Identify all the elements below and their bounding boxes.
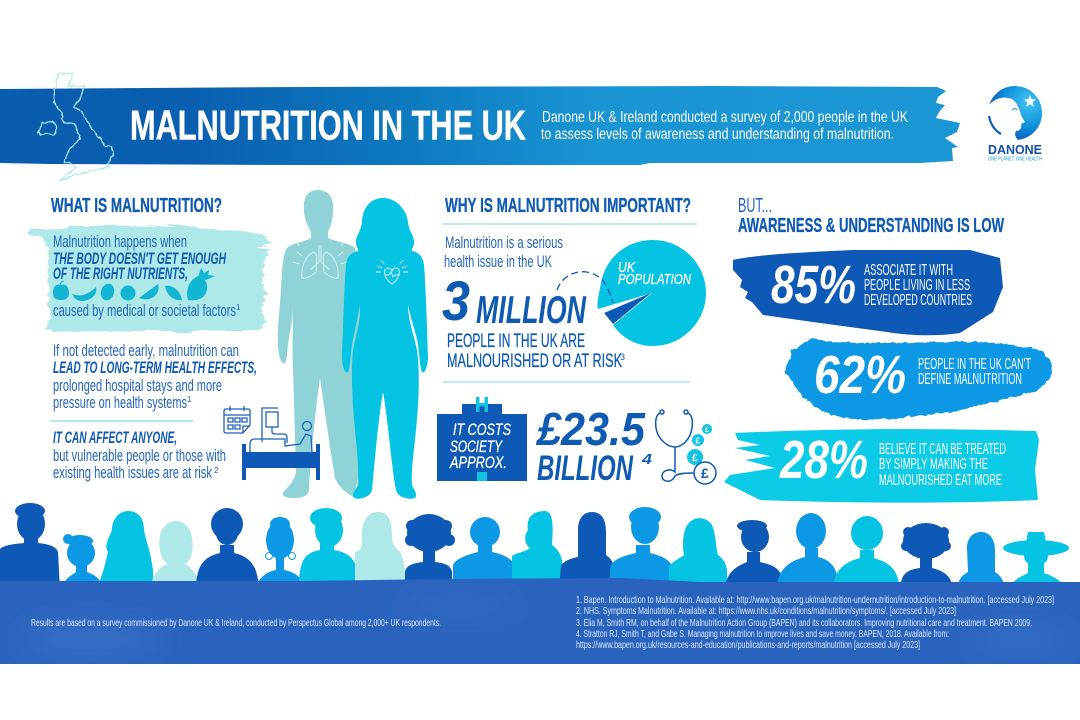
icon: hospital bed — [242, 408, 320, 480]
stat text — [918, 356, 1031, 388]
figures: man and woman silhouettes — [278, 190, 428, 499]
text block: who it affects: but vulnerable people or those with — [53, 447, 226, 465]
text block: who it affects: existing health issues are at risk — [53, 464, 212, 482]
man right arm — [345, 250, 363, 363]
crowd silhouettes — [0, 503, 1069, 590]
definition text: Malnutrition happens when — [53, 233, 187, 251]
definition text: THE BODY DOESN'T GET ENOUGH — [53, 249, 226, 268]
section heading: awareness and understanding: BUT... — [738, 195, 772, 217]
statistic: 3 million: PEOPLE IN THE UK ARE — [447, 331, 585, 352]
stat text — [864, 262, 972, 309]
text block: health effects: LEAD TO LONG-TERM HEALTH EFFECTS, — [53, 358, 257, 377]
statistic: 23.5 billion pounds: £23.5 — [535, 403, 646, 455]
stat panel: 62 percent: 62% — [814, 345, 906, 405]
icon: stethoscope with coins: £ — [701, 465, 709, 481]
statistic: 23.5 billion pounds: BILLION — [537, 449, 633, 488]
icon: stethoscope with coins: £ — [692, 453, 698, 464]
icon: stethoscope with coins — [656, 410, 716, 484]
header banner — [0, 73, 960, 181]
references: https://www.bapen.org.uk/resources-and-education/publications-and-reports/malnutrition [accessed July 2023] — [576, 639, 920, 651]
definition text: OF THE RIGHT NUTRIENTS, — [53, 264, 188, 283]
icons: fruit row — [53, 268, 215, 302]
title: MALNUTRITION IN THE UK — [130, 102, 526, 148]
stat panel: 28 percent — [724, 429, 1039, 503]
icon: UK map outline — [38, 73, 113, 181]
definition text: 1 — [236, 303, 241, 312]
Danone logo — [984, 86, 1042, 162]
dashed arc — [557, 272, 613, 303]
statistic: 23.5 billion pounds — [535, 403, 653, 488]
text block: serious issue: Malnutrition is a serious — [445, 234, 563, 252]
panel: definition on aqua brush — [30, 226, 270, 332]
statistic: 3 million: MILLION — [476, 289, 587, 332]
icon: calendar — [224, 406, 250, 433]
icon: heart — [376, 260, 408, 284]
pie label: UK — [618, 259, 636, 276]
icon: stethoscope with coins: £ — [705, 427, 709, 434]
pie label — [618, 259, 691, 288]
stat panel: 85 percent — [733, 250, 1003, 335]
Danone logo: DANONE — [988, 142, 1042, 157]
definition text: caused by medical or societal factors — [53, 302, 236, 320]
icon: stethoscope with coins: £ — [696, 436, 700, 446]
building text: SOCIETY — [450, 437, 503, 456]
icon: lungs — [293, 241, 347, 278]
references — [576, 594, 1054, 651]
text block: who it affects — [53, 428, 226, 482]
survey note: Results are based on a survey commissioned by Danone UK & Ireland, conducted by Perspectus Global among 2,000+ UK respondents. — [31, 617, 441, 629]
section heading: why is malnutrition important: WHY IS MALNUTRITION IMPORTANT? — [445, 195, 691, 217]
stat text: DEVELOPED COUNTRIES — [864, 292, 972, 309]
statistic: 3 million: 3 — [442, 269, 470, 332]
definition text — [53, 233, 241, 320]
stat text — [879, 441, 1006, 489]
text block: health effects: pressure on health systems — [53, 394, 187, 412]
section heading: awareness and understanding — [738, 195, 1004, 237]
statistic: 3 million: 3 — [620, 352, 625, 362]
stat text: ASSOCIATE IT WITH — [864, 262, 953, 279]
pie label: POPULATION — [618, 271, 691, 288]
footer panel — [0, 578, 1080, 664]
Danone logo: ONE PLANET. ONE HEALTH — [988, 156, 1042, 162]
statistic: 23.5 billion pounds: 4 — [641, 451, 653, 468]
building text: APPROX. — [449, 453, 507, 472]
text block: health effects: 1 — [187, 395, 192, 404]
statistic: 3 million: MALNOURISHED OR AT RISK — [447, 351, 622, 372]
header intro text — [541, 109, 908, 143]
text block: health effects: If not detected early, malnutrition can — [53, 342, 239, 360]
header intro text: to assess levels of awareness and understanding of malnutrition. — [541, 126, 894, 143]
building text — [449, 420, 511, 472]
text block: serious issue — [444, 234, 563, 271]
man silhouette — [278, 190, 362, 498]
header intro text: Danone UK & Ireland conducted a survey of 2,000 people in the UK — [542, 109, 908, 126]
statistic: 3 million — [442, 269, 625, 372]
text block: who it affects: 2 — [214, 466, 219, 475]
icon: hospital building with cost text — [437, 397, 527, 481]
text block: health effects: prolonged hospital stays and more — [53, 377, 222, 395]
stat text: PEOPLE LIVING IN LESS — [864, 277, 970, 294]
woman silhouette — [342, 198, 428, 499]
stat panel: 62 percent — [785, 338, 1052, 420]
stat text: BY SIMPLY MAKING THE — [879, 456, 988, 473]
section heading: what is malnutrition: WHAT IS MALNUTRITION? — [51, 195, 222, 217]
building text: IT COSTS — [453, 420, 511, 439]
text block: serious issue: health issue in the UK — [444, 253, 552, 271]
text block: who it affects: IT CAN AFFECT ANYONE, — [53, 428, 177, 447]
stat panel: 85 percent: 85% — [771, 255, 856, 315]
stat panel: 28 percent: 28% — [779, 430, 868, 490]
text block: health effects — [53, 342, 257, 412]
chart: UK population pie — [557, 240, 706, 346]
